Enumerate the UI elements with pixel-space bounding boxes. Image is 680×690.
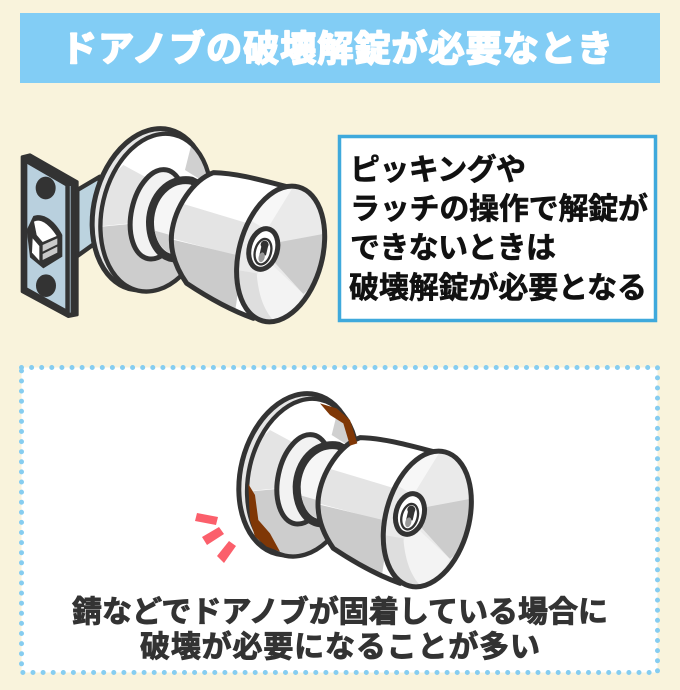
panel: rust example	[22, 368, 658, 672]
rust caption: 錆などでドアノブが固着している場合に	[72, 595, 608, 629]
screws	[36, 177, 56, 199]
callout text	[349, 154, 648, 305]
latch plate	[22, 155, 77, 317]
impact marks	[195, 513, 236, 563]
title banner	[20, 13, 660, 83]
callout text: 破壊解錠が必要となる	[349, 271, 647, 305]
illustration: door knob with latch	[22, 116, 339, 332]
illustration: rusted door knob	[222, 381, 485, 597]
latch bolt	[27, 215, 62, 268]
callout text: ラッチの操作で解錠が	[350, 192, 648, 226]
latch tube	[77, 177, 100, 256]
callout box	[340, 136, 656, 320]
title text: ドアノブの破壊解錠が必要なとき	[61, 28, 613, 69]
callout text: ピッキングや	[350, 154, 526, 187]
rust caption	[72, 595, 608, 664]
door knob	[76, 116, 339, 332]
rust caption: 破壊が必要になることが多い	[140, 630, 540, 664]
callout text: できないときは	[350, 232, 556, 265]
rust patches	[248, 403, 357, 552]
